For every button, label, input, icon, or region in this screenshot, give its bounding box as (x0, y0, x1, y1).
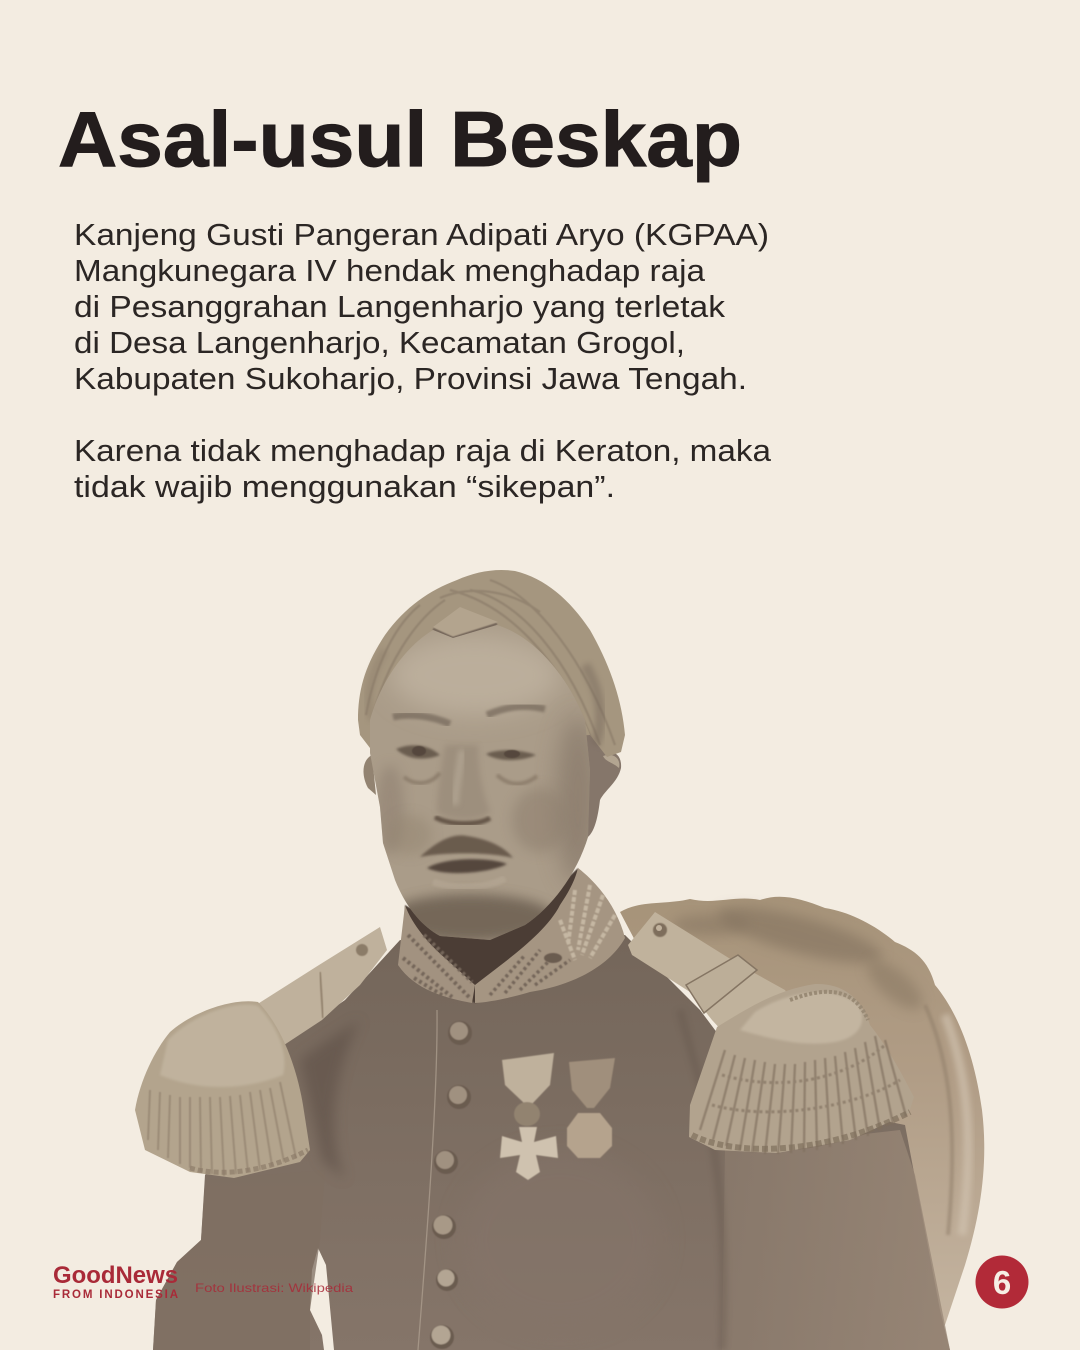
logo: GoodNews from Indonesia: GoodNews (53, 1262, 178, 1289)
portrait photo: KGPAA Mangkunegara IV (135, 570, 984, 1350)
page number badge: 6 (993, 1264, 1011, 1301)
medal: octagon with ribbon (567, 1058, 615, 1158)
page number badge (976, 1256, 1028, 1308)
ear left (363, 755, 376, 795)
body text paragraph 2 (74, 433, 772, 504)
uniform jacket (153, 935, 950, 1350)
nose (437, 745, 490, 820)
left eye (396, 745, 440, 759)
body text paragraph 1: di Desa Langenharjo, Kecamatan Grogol, (74, 325, 685, 360)
body text paragraph 1: Mangkunegara IV hendak menghadap raja (74, 253, 706, 288)
right eye (486, 750, 536, 760)
jacket buttons (430, 1021, 472, 1349)
body text paragraph 1: Kabupaten Sukoharjo, Provinsi Jawa Tengah. (74, 361, 747, 396)
neck shadow (405, 868, 580, 1003)
moustache (420, 835, 513, 858)
medal: cross with ribbon (500, 1053, 558, 1180)
ear right highlight (603, 755, 619, 768)
body text paragraph 2: tidak wajib menggunakan “sikepan”. (74, 469, 615, 504)
left brow (393, 715, 450, 724)
body text paragraph 1: di Pesanggrahan Langenharjo yang terletak (74, 289, 726, 324)
left epaulette strap (256, 927, 387, 1047)
turban (358, 570, 625, 757)
mouth (427, 859, 507, 873)
body text paragraph 1: Kanjeng Gusti Pangeran Adipati Aryo (KGPAA) (74, 217, 769, 252)
face (370, 625, 600, 942)
chair back (620, 896, 984, 1325)
left epaulette fringe (135, 1001, 310, 1178)
ear right (570, 725, 621, 840)
body text paragraph 2: Karena tidak menghadap raja di Keraton, maka (74, 433, 772, 468)
right epaulette strap (628, 912, 810, 1045)
embroidered collar left (398, 905, 475, 1003)
logo: GoodNews from Indonesia: FROM INDONESIA (53, 1289, 178, 1301)
embroidered collar right (475, 868, 625, 1003)
right epaulette fringe (689, 984, 914, 1154)
body text paragraph 1 (74, 217, 769, 396)
right brow (487, 707, 545, 715)
title: Asal-usul Beskap (58, 95, 742, 183)
logo: GoodNews from Indonesia (53, 1262, 178, 1301)
photo credit: Foto Ilustrasi: Wikipedia (195, 1281, 353, 1295)
